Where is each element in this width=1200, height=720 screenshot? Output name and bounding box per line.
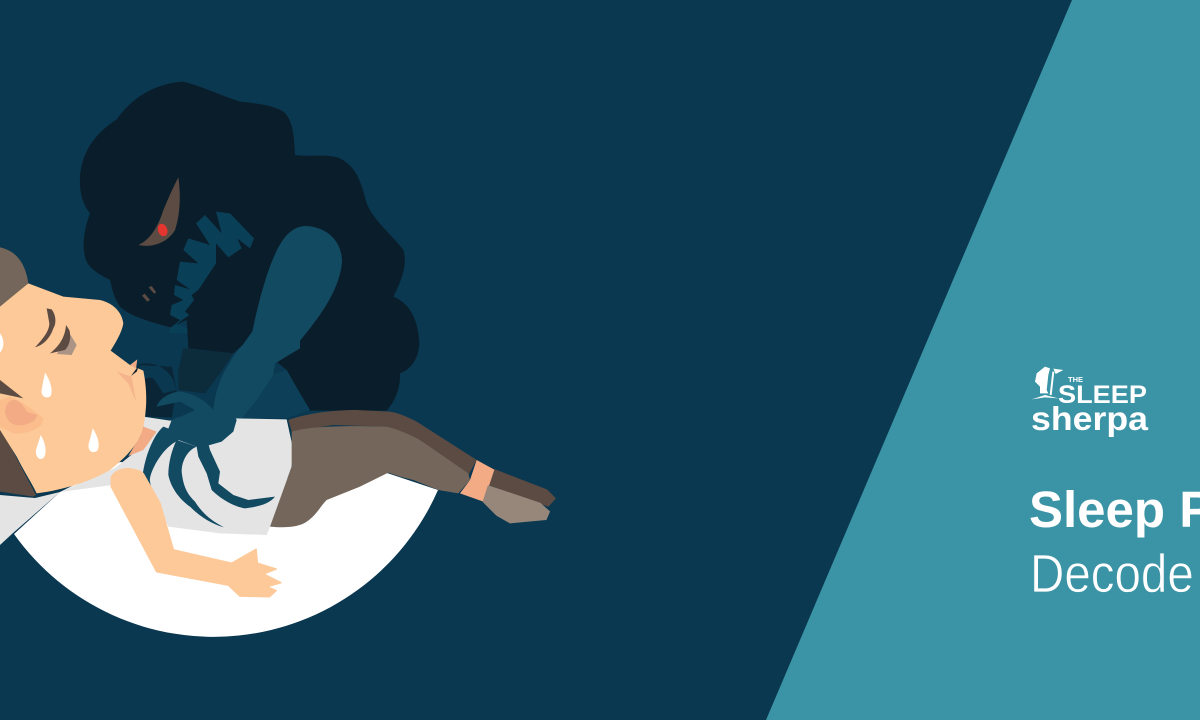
illustration: sleeper and shadow creature [0,82,555,637]
trousers dark [288,410,477,475]
hair top [0,247,28,308]
creature lower shade [233,370,310,418]
shirt [143,417,293,535]
claw hand [143,412,275,527]
logo icon: climber with flag [1032,367,1063,399]
mouth [130,359,137,368]
white crescent moon [14,462,438,637]
hair lower [0,427,36,497]
creature silhouette [80,82,419,411]
tears [0,333,99,459]
subtitle: Decode [1030,543,1194,604]
lower creature body [137,327,310,420]
trousers light [270,426,470,527]
sleeper arm and hand [111,469,281,597]
pillow [0,440,170,545]
red pupil [156,222,169,238]
sleeper head [0,247,157,497]
face [0,283,146,493]
back sock [490,470,555,506]
eyelashes [35,308,70,353]
teal diagonal panel [766,0,1200,720]
ear [0,397,43,433]
eyelid [57,335,77,355]
creature second arm [137,363,177,417]
cheek line [117,372,136,402]
claw one [143,427,178,499]
creature upper arm [220,226,342,395]
creature teeth [169,212,254,333]
inner ear [5,400,37,425]
mouth dark [131,365,139,376]
neck [128,427,157,456]
claw two [168,440,224,527]
creature arm [157,327,300,420]
logo small word: THE [1068,377,1083,384]
ankle [460,460,495,502]
palm [163,412,237,447]
logo: The Sleep Sherpa [1031,367,1149,437]
shadow creature [80,82,419,411]
sideburn [0,380,23,398]
front sock [483,486,549,523]
shirt and legs [111,410,555,597]
logo word sleep: SLEEP [1058,381,1147,409]
claw three [197,443,275,508]
creature neck [178,348,233,393]
logo word sherpa: sherpa [1031,400,1149,437]
creature nostrils [142,286,156,302]
creature eye [138,177,180,246]
